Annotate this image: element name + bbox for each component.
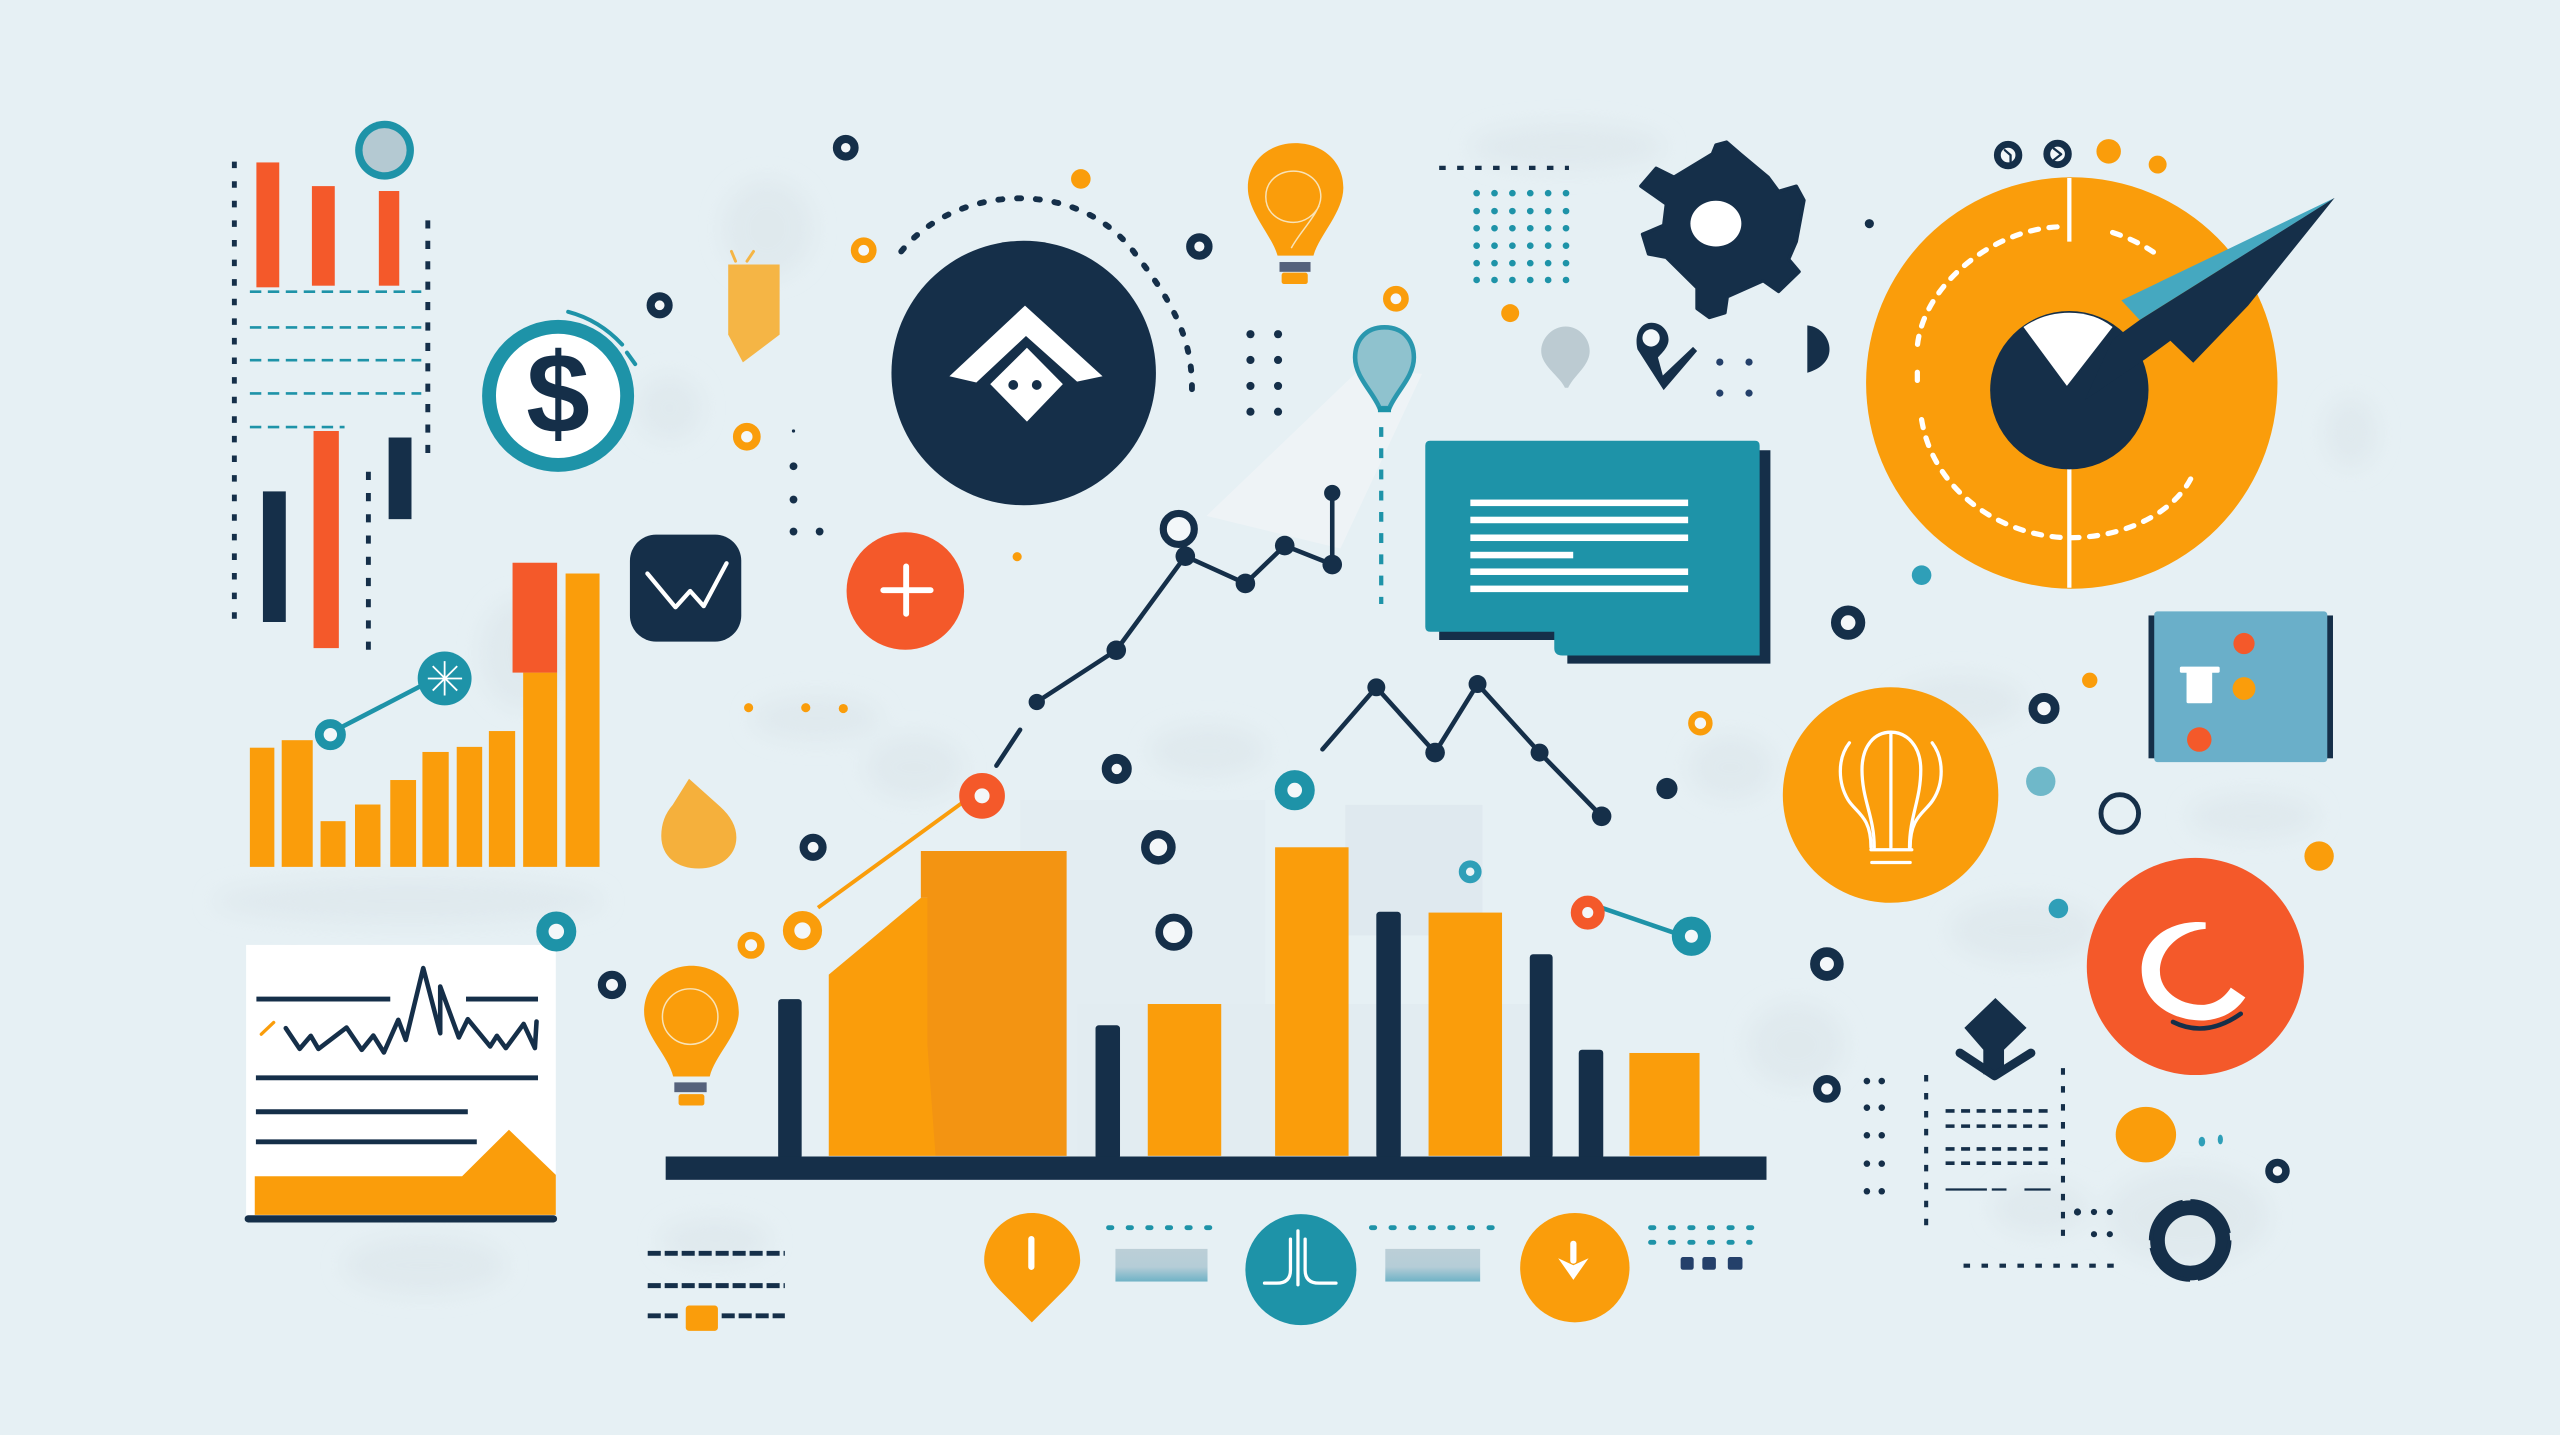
icon: navy diamond arrow	[1960, 998, 2031, 1076]
text rules	[256, 1078, 538, 1142]
base line	[248, 1217, 554, 1221]
panel: main bar chart	[666, 847, 1766, 1180]
small teal dot	[1912, 565, 1931, 585]
tiny teal marks	[2199, 1135, 2223, 1147]
teal snowflake node	[418, 652, 472, 705]
small right markers	[2026, 673, 2334, 918]
axis	[666, 1156, 1766, 1180]
dashed white ring	[1917, 227, 2192, 538]
table rows	[1946, 1111, 2051, 1163]
gradient bar two	[1385, 1249, 1480, 1282]
icon: navy ring	[804, 838, 823, 857]
icon: orange ring	[1387, 290, 1405, 308]
arrow pointer	[2085, 198, 2335, 400]
white text lines	[1470, 500, 1688, 592]
icon: red circle with C mark	[2087, 858, 2304, 1075]
teal connector line	[336, 682, 428, 730]
panel: report card	[246, 945, 556, 1221]
connector: red to teal node	[1576, 901, 1704, 949]
orange bars	[250, 574, 600, 867]
icon: orange light bulb left	[644, 966, 739, 1106]
icon: red plus circle	[847, 532, 964, 650]
teal dashed stem	[1380, 427, 1383, 604]
icon: orange download circle	[1520, 1213, 1630, 1322]
icon: navy ring	[651, 296, 669, 314]
navy hub with white wedge	[1990, 311, 2149, 469]
small navy dot	[1865, 219, 1874, 228]
dashed arc	[901, 198, 1192, 393]
icon: orange circle with bulb outline	[1783, 687, 1998, 903]
legend: dashed rows with orange marker	[648, 1253, 785, 1331]
orange bars	[1148, 847, 1700, 1156]
icon: navy ring	[2269, 1163, 2286, 1180]
panel: teal document	[1425, 441, 1770, 664]
table dashed frame	[1926, 1068, 2115, 1266]
lower bars	[263, 431, 411, 648]
icon: navy gear	[1641, 142, 1804, 318]
rings: navy markers over chart	[1107, 759, 1189, 947]
dots: navy four	[1716, 359, 1753, 397]
line chart: rising navy trend	[996, 485, 1342, 766]
table total row	[1946, 1188, 2051, 1190]
icon: grey balloon	[1541, 327, 1590, 388]
orange area	[255, 1130, 556, 1215]
panel: big orange gauge	[1866, 177, 2335, 589]
icon: navy half circle	[1807, 325, 1830, 373]
icon: navy cog ring	[2151, 1201, 2229, 1280]
icon: dollar coin	[489, 312, 635, 465]
icon: navy ring	[1815, 952, 1839, 976]
icon: pin with checkmark	[1637, 323, 1697, 390]
icon: orange pin	[984, 1213, 1080, 1322]
panel: big navy circle with roof icon	[891, 241, 1156, 505]
panel: dotted table	[1864, 1068, 2115, 1266]
dots: navy vertical	[790, 429, 824, 535]
small orange dot	[1013, 552, 1022, 561]
rings: teal markers	[1281, 776, 1478, 880]
gauge disc	[1866, 177, 2277, 589]
top right markers	[1997, 139, 2167, 174]
small navy blocks	[1681, 1257, 1742, 1270]
middle dashed axis	[367, 472, 370, 651]
icon: navy ring	[1817, 1079, 1837, 1099]
icon: dollar coin: $	[526, 331, 590, 458]
light beam behind line chart	[1207, 369, 1422, 549]
white T symbol	[2180, 667, 2220, 703]
side bars	[2149, 615, 2333, 758]
teal dashed grid lines	[250, 292, 421, 427]
panel: top-left bar chart	[234, 162, 428, 651]
dots: teal grid	[1477, 193, 1569, 280]
dots: orange row	[744, 703, 848, 713]
teal front	[1425, 441, 1760, 655]
icon: small orange ring	[741, 935, 761, 955]
vertical divider	[2068, 178, 2071, 588]
small markers right of chart	[1656, 714, 1709, 799]
corner dots	[2074, 1208, 2113, 1237]
top small markers	[837, 139, 1208, 259]
upper red bars	[256, 162, 399, 287]
icon: teal ring	[542, 918, 570, 945]
orange tick	[261, 1022, 274, 1034]
navy bars	[778, 912, 1603, 1159]
teal ring node	[319, 724, 341, 746]
line chart: navy zig-zag	[1322, 675, 1611, 826]
icon: orange blob	[2116, 1107, 2176, 1162]
icon: navy ring	[1836, 610, 1860, 635]
icon: navy ring	[602, 975, 622, 995]
icon: orange droplet	[661, 779, 736, 869]
header rules	[256, 998, 538, 1001]
sparkline	[286, 968, 537, 1052]
icon: teal circle	[1245, 1214, 1356, 1325]
icon: orange light bulb top	[1248, 143, 1343, 284]
icon: textured teal circle	[355, 121, 414, 180]
light backdrop behind main chart	[1020, 800, 1551, 1156]
card body	[2154, 611, 2327, 762]
gradient bar one	[1115, 1249, 1208, 1282]
navy back layer	[1439, 450, 1770, 664]
icon: orange ring	[737, 427, 757, 446]
dot columns	[1864, 1078, 1885, 1195]
dashed top row	[1439, 167, 1569, 169]
right dashed axis	[426, 220, 429, 460]
icon: teal balloon	[1355, 327, 1414, 412]
left dashed axis	[233, 162, 236, 620]
orange stepped bar	[829, 851, 1067, 1156]
dots	[2187, 633, 2255, 752]
small orange dot	[1501, 304, 1519, 322]
connector: orange segment with nodes	[789, 781, 997, 944]
panel: orange bar chart with connector	[250, 563, 600, 867]
teal dots	[1109, 1228, 1768, 1242]
panel: bottom icon row	[984, 1213, 1768, 1325]
card background	[246, 945, 556, 1221]
dots: navy grid	[1246, 330, 1282, 416]
red bar segment	[513, 563, 557, 673]
background texture blotches	[212, 124, 2377, 1295]
panel: blue card	[2149, 611, 2333, 762]
icon: yellow tag	[728, 251, 780, 362]
icon: navy chart tile	[630, 535, 741, 642]
